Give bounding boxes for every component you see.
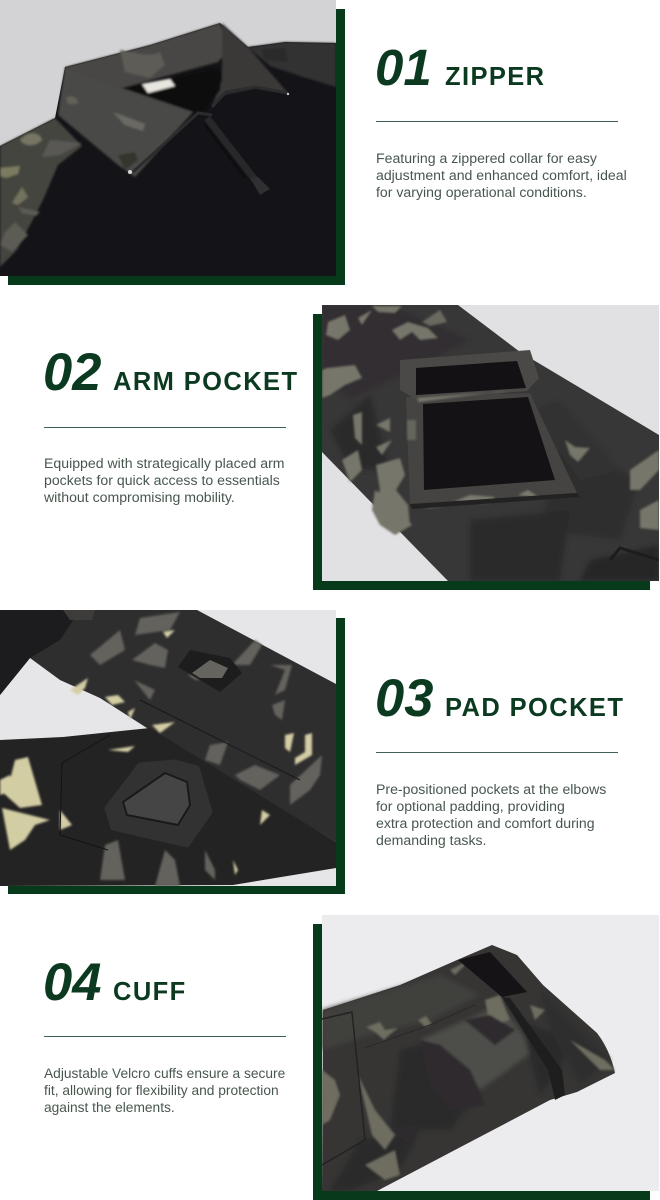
text: cuff description: fit, allowing for flexibility and protection <box>44 1083 279 1098</box>
photo: arm pocket <box>322 305 659 581</box>
text: zipper description <box>376 150 627 200</box>
heading: 03 pad pocket <box>375 669 624 728</box>
green frame: pad pocket photo <box>8 618 345 894</box>
heading: 03 pad pocket: PAD POCKET <box>445 694 624 722</box>
text: arm pocket description: Equipped with strategically placed arm <box>44 455 285 471</box>
heading: 01 zipper: ZIPPER <box>445 63 546 91</box>
panel: pad pocket <box>0 610 624 894</box>
panel: arm pocket <box>43 305 659 590</box>
heading: 02 arm pocket <box>43 343 298 402</box>
text: arm pocket description: pockets for quick access to essentials <box>44 472 280 488</box>
heading: 04 cuff: 04 <box>43 953 101 1012</box>
photo: zippered collar <box>0 0 336 276</box>
panel: zipper <box>0 0 627 285</box>
text: arm pocket description <box>44 455 285 505</box>
green frame: cuff photo <box>313 924 650 1200</box>
green frame: zipper photo <box>8 9 345 285</box>
heading: 03 pad pocket: 03 <box>375 669 433 728</box>
text: pad pocket description: for optional padding, providing <box>376 798 565 814</box>
green frame: arm pocket photo <box>313 314 650 590</box>
text: pad pocket description <box>376 781 606 848</box>
text: zipper description: adjustment and enhanced comfort, ideal <box>376 167 627 183</box>
text: zipper description: for varying operational conditions. <box>376 184 587 200</box>
text: cuff description <box>44 1066 285 1115</box>
text: cuff description: against the elements. <box>44 1100 175 1115</box>
photo: velcro cuff <box>322 915 659 1191</box>
text: zipper description: Featuring a zippered collar for easy <box>376 150 597 166</box>
heading: 04 cuff: CUFF <box>113 978 187 1006</box>
text: pad pocket description: extra protection and comfort during <box>376 815 595 831</box>
text: pad pocket description: demanding tasks. <box>376 832 486 848</box>
heading: 04 cuff <box>43 953 187 1012</box>
panel: cuff <box>43 915 659 1200</box>
text: pad pocket description: Pre-positioned pockets at the elbows <box>376 781 606 797</box>
heading: 01 zipper: 01 <box>375 39 432 96</box>
heading: 02 arm pocket: 02 <box>43 343 101 402</box>
photo: elbow pad pocket <box>0 610 336 886</box>
heading: 02 arm pocket: ARM POCKET <box>113 368 298 396</box>
text: arm pocket description: without compromising mobility. <box>44 489 235 505</box>
heading: 01 zipper <box>375 39 546 96</box>
text: cuff description: Adjustable Velcro cuffs ensure a secure <box>44 1066 285 1081</box>
